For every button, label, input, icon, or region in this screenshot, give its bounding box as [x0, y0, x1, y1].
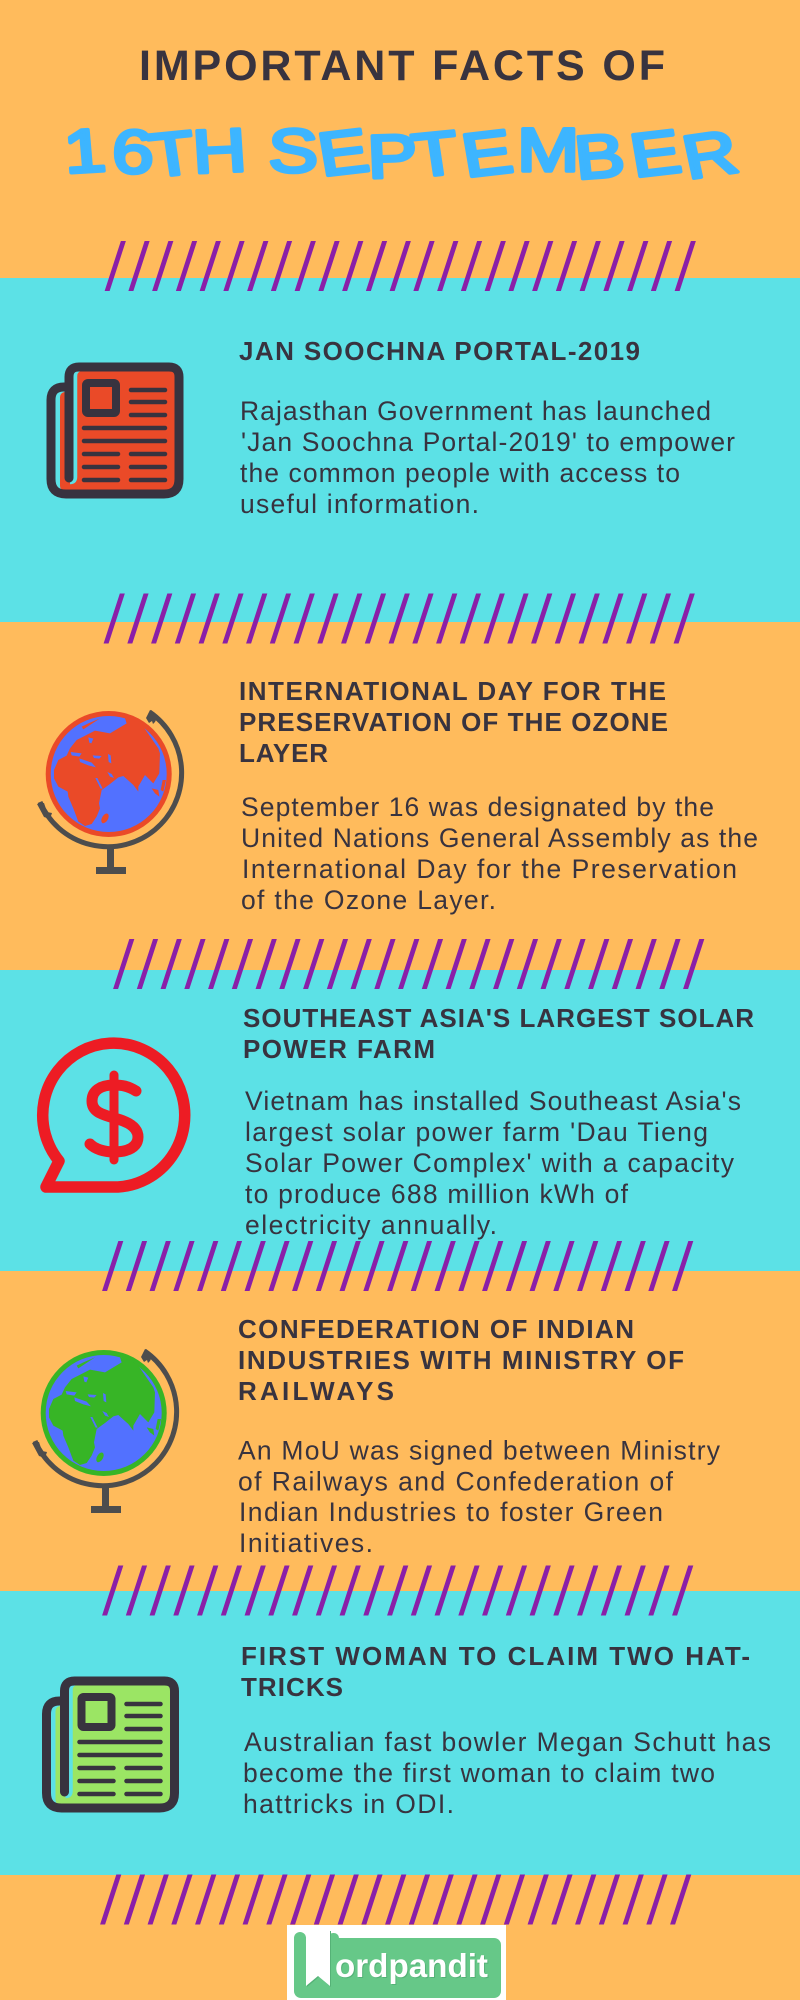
hatch divider 6 — [108, 1874, 683, 1924]
heading: INTERNATIONAL DAY FOR THE — [239, 676, 666, 706]
body text: Initiatives. — [239, 1528, 373, 1558]
body text — [241, 792, 758, 915]
logo: Wordpandit: ordpandit — [335, 1947, 488, 1984]
body text — [238, 1436, 721, 1558]
hatch divider 3 — [121, 939, 696, 989]
body text: hattricks in ODI. — [243, 1789, 454, 1819]
icon: globe red — [37, 710, 182, 874]
body text — [245, 1086, 741, 1240]
heading: PRESERVATION OF THE OZONE — [239, 707, 668, 737]
title: IMPORTANT FACTS OF — [139, 42, 665, 90]
heading — [239, 676, 668, 768]
body text: Indian Industries to foster Green — [239, 1497, 663, 1527]
hatch divider 1 — [113, 241, 688, 291]
body text: the common people with access to — [240, 458, 680, 488]
hatch divider 2 — [112, 594, 687, 644]
body text: become the first woman to claim two — [243, 1758, 715, 1788]
icon: dollar speech bubble — [43, 1043, 185, 1187]
icon: newspaper red — [51, 367, 179, 494]
heading: TRICKS — [241, 1672, 343, 1702]
heading: INDUSTRIES WITH MINISTRY OF — [238, 1345, 684, 1375]
body text: Solar Power Complex' with a capacity — [245, 1148, 735, 1178]
body text: September 16 was designated by the — [241, 792, 714, 822]
icon: globe green — [32, 1349, 177, 1513]
heading: SOUTHEAST ASIA'S LARGEST SOLAR — [243, 1003, 754, 1033]
heading — [241, 1641, 750, 1702]
body text: to produce 688 million kWh of — [245, 1179, 629, 1209]
heading: JAN SOOCHNA PORTAL-2019 — [239, 336, 640, 366]
body text: Rajasthan Government has launched — [240, 396, 711, 426]
date heading: 16TH SEPTEMBER — [61, 116, 744, 192]
body text — [240, 396, 735, 519]
body text — [243, 1727, 771, 1819]
heading: RAILWAYS — [238, 1376, 394, 1406]
heading — [243, 1003, 754, 1064]
panel: Southeast Asia's Largest Solar Power Farm — [43, 1003, 754, 1240]
body text: Australian fast bowler Megan Schutt has — [244, 1727, 771, 1757]
heading: POWER FARM — [243, 1034, 435, 1064]
heading: CONFEDERATION OF INDIAN — [238, 1314, 634, 1344]
body text: useful information. — [240, 489, 479, 519]
body text: 'Jan Soochna Portal-2019' to empower — [241, 427, 735, 457]
hatch divider 5 — [110, 1566, 685, 1616]
heading: FIRST WOMAN TO CLAIM TWO HAT- — [241, 1641, 750, 1671]
panel: Confederation of Indian Industries with Ministry of Railways — [32, 1314, 721, 1558]
panel: Jan Soochna Portal — [51, 336, 735, 519]
body text: of Railways and Confederation of — [238, 1466, 674, 1496]
logo: Wordpandit — [287, 1925, 506, 2000]
body text: largest solar power farm 'Dau Tieng — [245, 1117, 708, 1147]
panel: International Day for the Preservation of the Ozone Layer — [37, 676, 758, 915]
body text: International Day for the Preservation — [242, 854, 737, 884]
body text: An MoU was signed between Ministry — [238, 1436, 721, 1466]
body text: electricity annually. — [245, 1210, 497, 1240]
hatch divider 4 — [110, 1241, 685, 1291]
body text: Vietnam has installed Southeast Asia's — [245, 1086, 741, 1116]
body text: United Nations General Assembly as the — [241, 823, 758, 853]
heading — [238, 1314, 684, 1406]
body text: of the Ozone Layer. — [241, 885, 496, 915]
panel: First Woman to Claim Two Hat-Tricks — [46, 1641, 771, 1819]
heading: LAYER — [239, 738, 328, 768]
icon: newspaper green — [46, 1681, 174, 1808]
